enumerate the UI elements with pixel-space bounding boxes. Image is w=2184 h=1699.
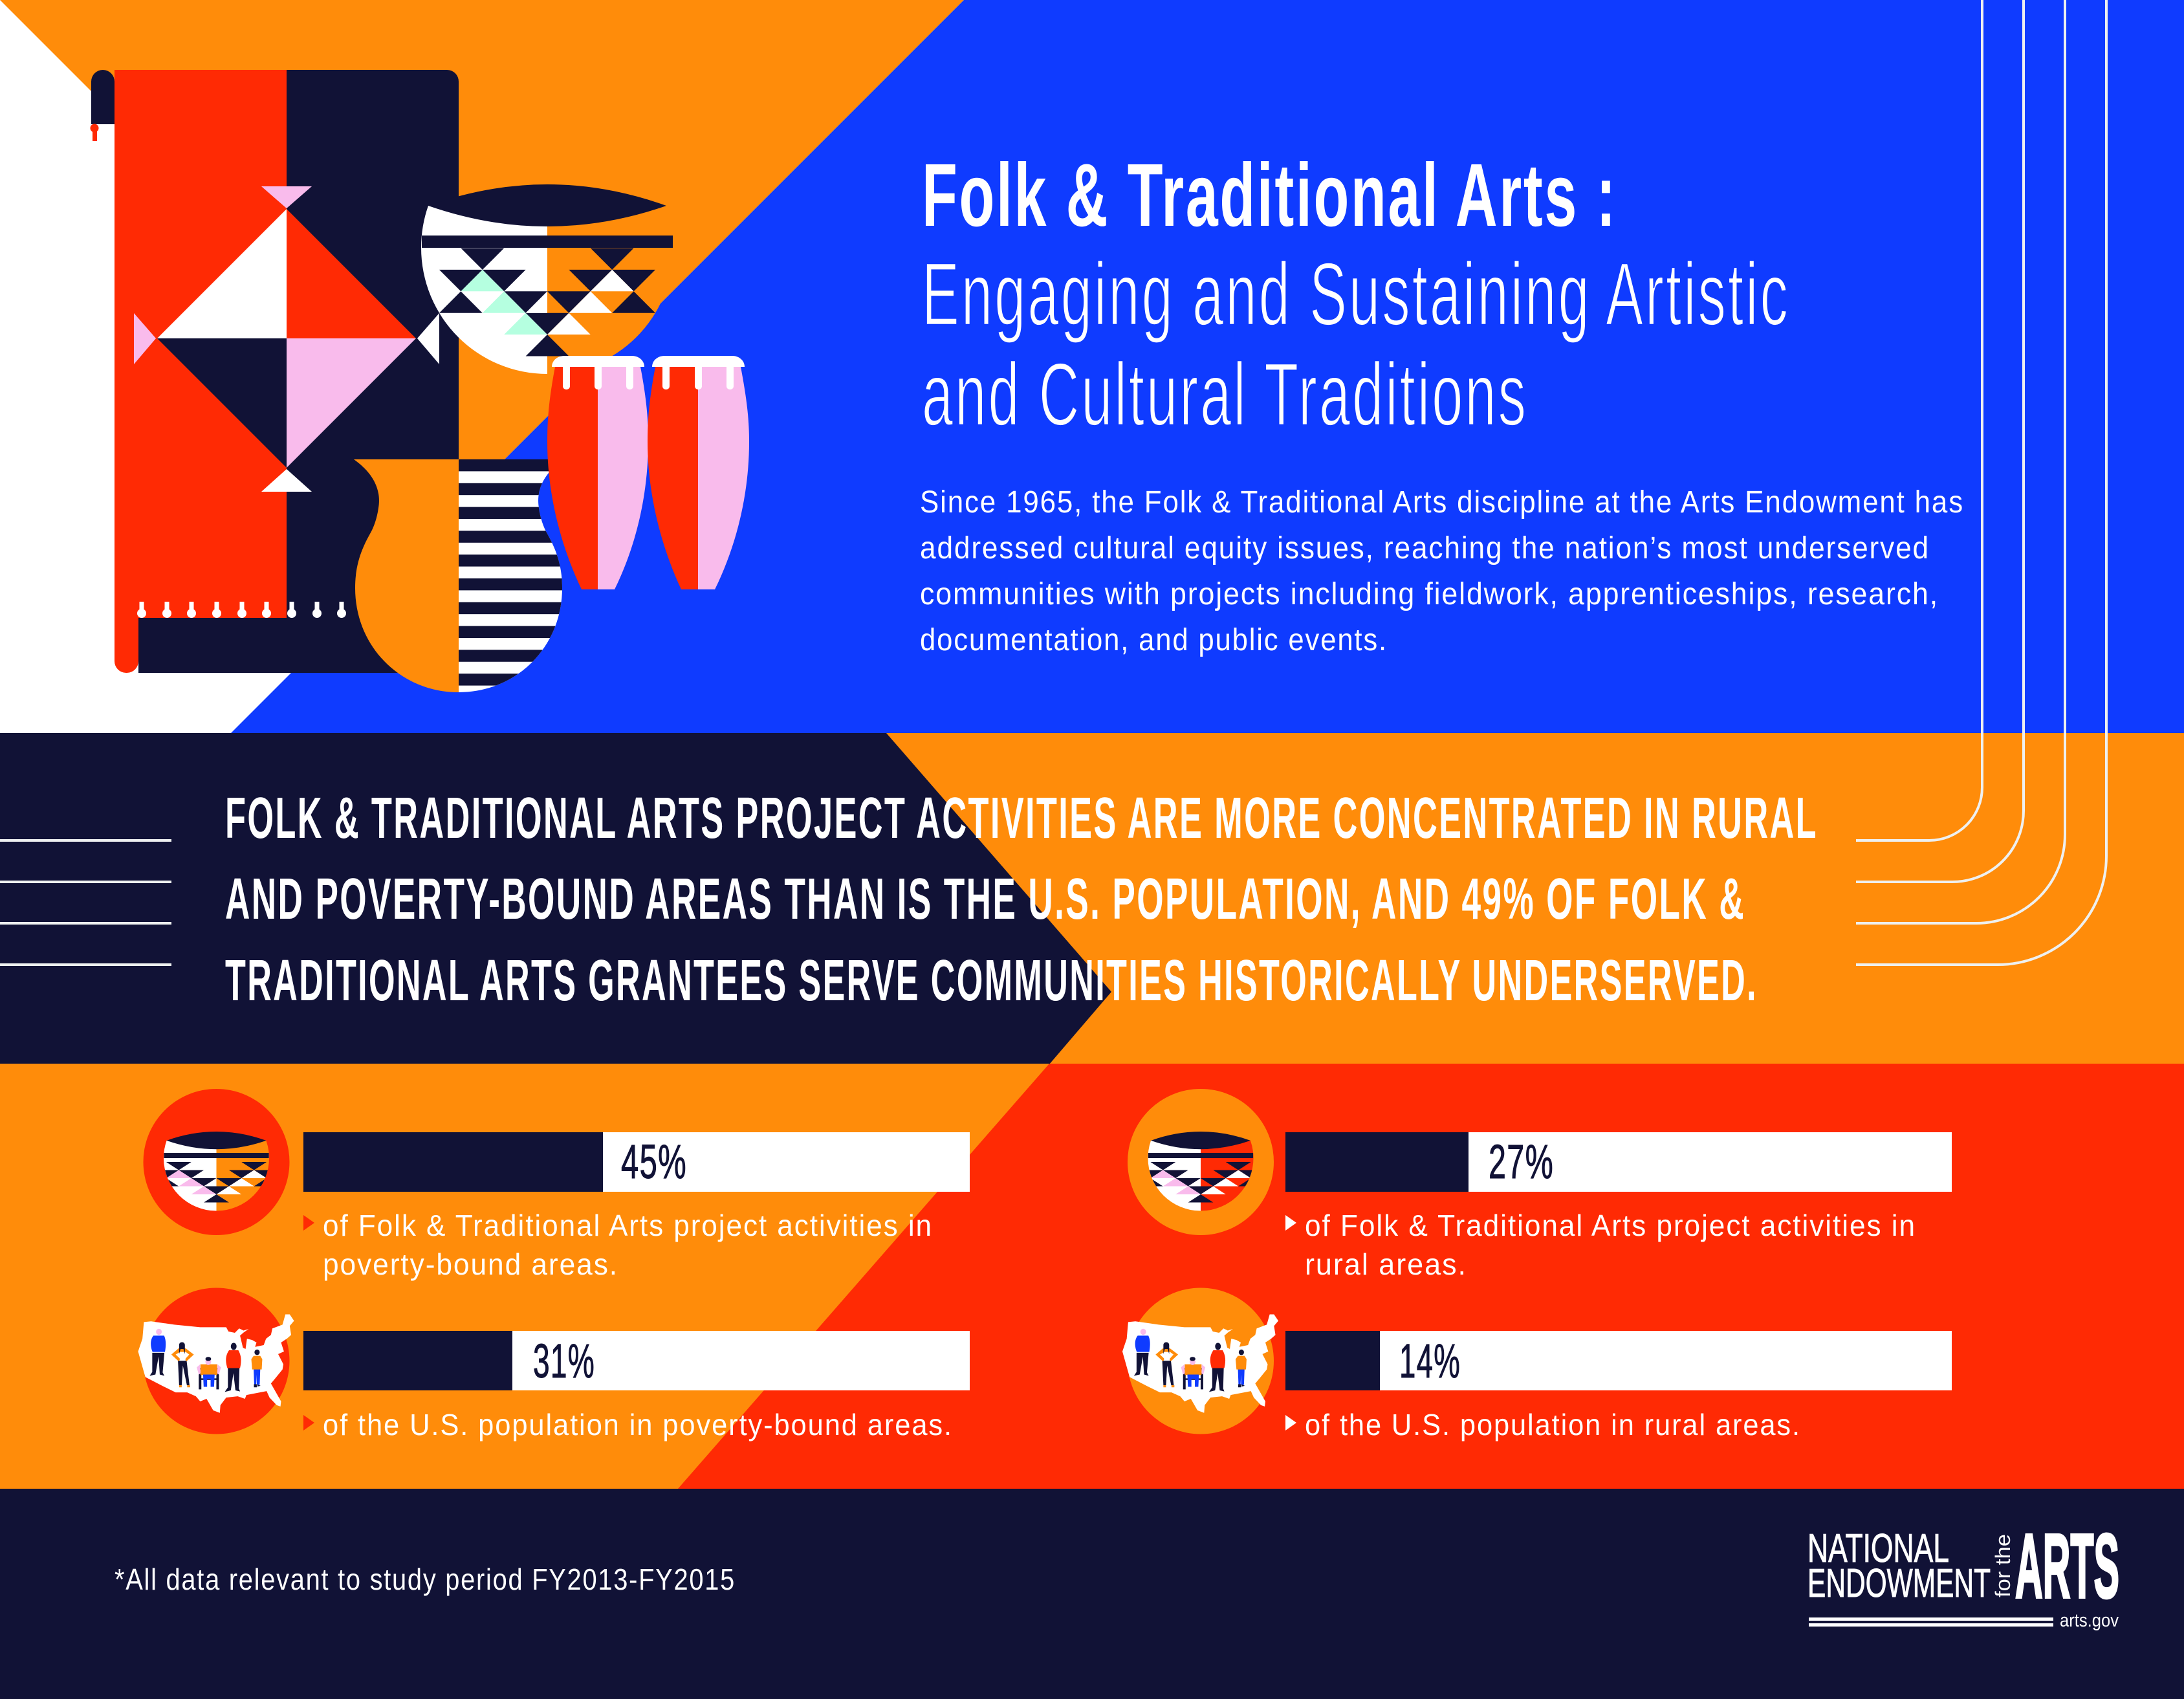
bar: 14% US population rural: 14% [1399, 1334, 1461, 1388]
bar: 31% US population poverty-bound [303, 1331, 970, 1390]
title: and Cultural Traditions [922, 345, 1528, 444]
background: white corner [0, 0, 970, 733]
rug tab with tassel [91, 70, 115, 141]
bar: 14% US population rural [1285, 1331, 1952, 1390]
description: 45%: of Folk & Traditional Arts project activities in [323, 1209, 933, 1242]
description: 31%: of the U.S. population in poverty-bound areas. [323, 1408, 953, 1441]
rug diamond pattern [134, 186, 439, 492]
panel: footer [0, 1489, 2184, 1699]
footnote: *All data relevant to study period FY2013-FY2015 [115, 1562, 736, 1596]
bar: 27% rural activities: 27% [1489, 1135, 1554, 1189]
description: 27% [1285, 1209, 1916, 1281]
bar: 31% US population poverty-bound: 31% [533, 1334, 595, 1388]
bar: 27% rural activities [1285, 1132, 1952, 1192]
title [922, 146, 1790, 444]
logo: National Endowment for the Arts: NATIONAL [1807, 1526, 1949, 1571]
intro paragraph: Since 1965, the Folk & Traditional Arts discipline at the Arts Endowment has [920, 485, 1964, 520]
intro paragraph: documentation, and public events. [920, 623, 1388, 657]
icon: US map in red circle [138, 1288, 294, 1434]
illustration: woven rug [91, 70, 459, 673]
background: blue header panel [231, 0, 2184, 733]
illustration: right conga drum [648, 356, 749, 589]
intro paragraph [920, 485, 1964, 657]
illustration: striped jar [354, 459, 569, 694]
logo: National Endowment for the Arts: ENDOWMENT [1807, 1561, 1991, 1606]
description: 27%: of Folk & Traditional Arts project activities in [1305, 1209, 1916, 1242]
logo: National Endowment for the Arts [1807, 1515, 2119, 1631]
illustration: left conga drum [547, 356, 648, 589]
icon: bowl in orange circle [1128, 1089, 1274, 1235]
illustration: patterned bowl [421, 184, 673, 374]
description: 45%: poverty-bound areas. [323, 1247, 618, 1281]
panel: statistics background [0, 1064, 2184, 1489]
bar: 45% poverty-bound activities: 45% [621, 1135, 687, 1189]
panel: key finding band [0, 733, 2184, 1064]
title: Folk & Traditional Arts : [922, 146, 1617, 245]
description: 14%: of the U.S. population in rural areas. [1305, 1408, 1801, 1441]
icon: bowl in red circle [144, 1089, 290, 1235]
bar: 45% poverty-bound activities [303, 1132, 970, 1192]
logo: National Endowment for the Arts: for the [1991, 1534, 2015, 1597]
description: 27%: rural areas. [1305, 1247, 1467, 1281]
icon: US map in orange circle [1122, 1288, 1278, 1434]
background: orange triangle [0, 0, 964, 482]
logo: National Endowment for the Arts: arts.gov [2060, 1610, 2119, 1631]
rug fringe [137, 602, 346, 618]
key finding text [225, 786, 1818, 1013]
intro paragraph: communities with projects including fieldwork, apprenticeships, research, [920, 577, 1939, 611]
intro paragraph: addressed cultural equity issues, reaching the nation’s most underserved [920, 531, 1930, 565]
description: 45% [303, 1209, 933, 1281]
